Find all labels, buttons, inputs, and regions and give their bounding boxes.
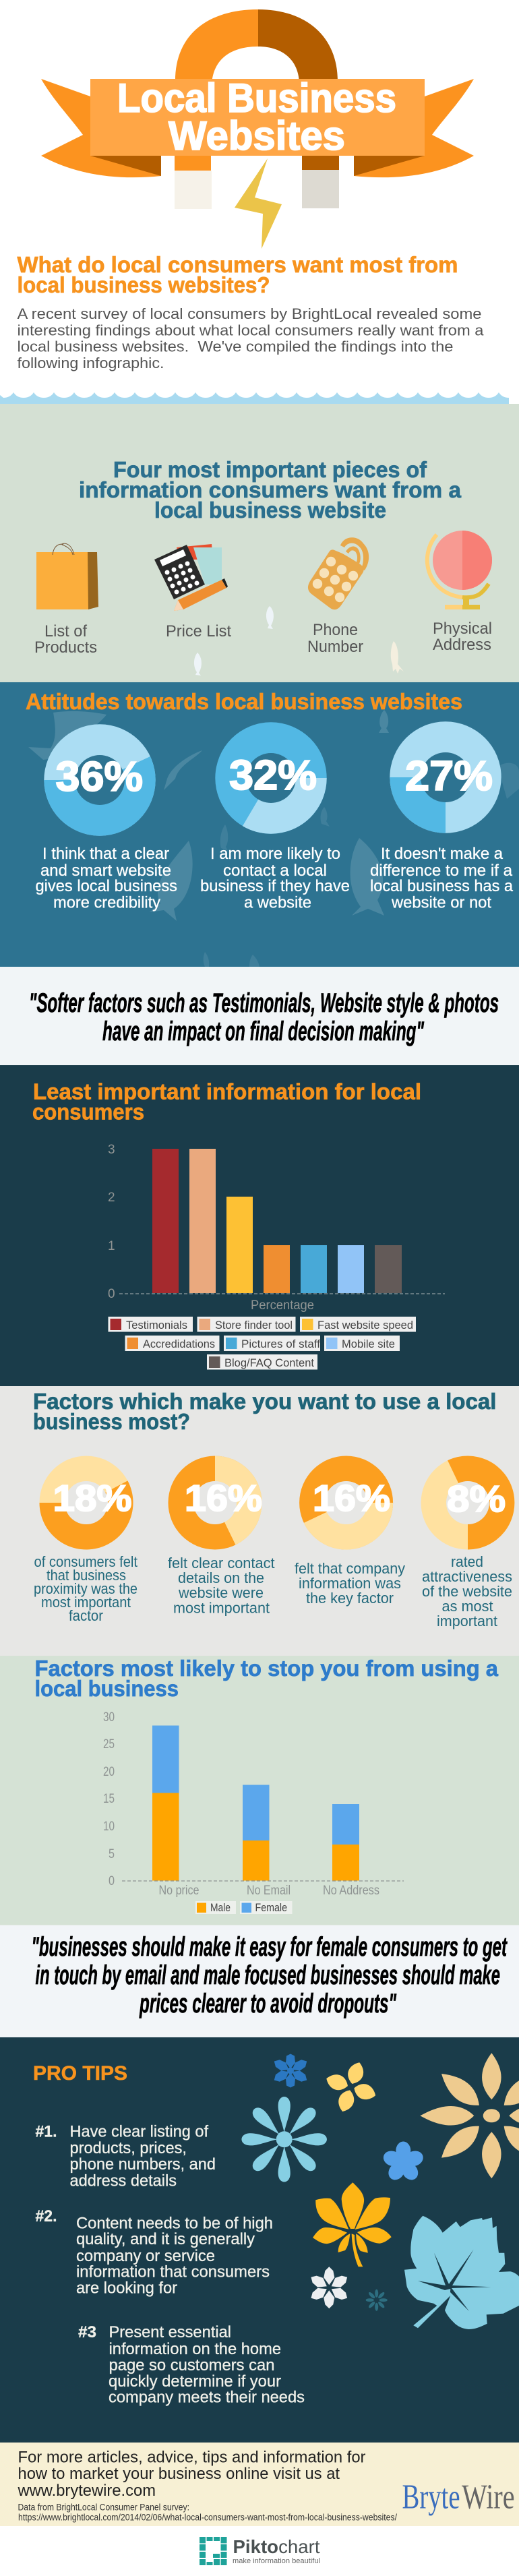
intro heading <box>18 252 458 297</box>
caption: 16% company <box>295 1560 405 1607</box>
panel: quote, softer factors <box>0 967 519 1065</box>
caption: 18%: most important <box>41 1594 131 1611</box>
caption: 32%: a website <box>244 894 311 911</box>
title: Local Business <box>117 76 396 121</box>
bar chart: 2 <box>108 1191 115 1205</box>
caption: 16% contact <box>168 1555 275 1617</box>
data source <box>18 2501 397 2523</box>
caption: 27%: difference to me if a <box>370 862 513 880</box>
intro paragraph: interesting findings about what local consumers really want from a <box>18 322 484 338</box>
decorative fish <box>194 606 404 676</box>
stacked bar chart: No price <box>159 1884 200 1898</box>
donut: 16% company <box>299 1456 393 1550</box>
legend <box>195 1901 293 1914</box>
tip 1: products, prices, <box>70 2139 187 2157</box>
legend: Female <box>255 1901 287 1914</box>
intro paragraph: local business websites. We've compiled the findings into the <box>18 338 453 355</box>
donut: 8% <box>421 1456 515 1549</box>
stacked bar chart: No Email <box>247 1884 291 1898</box>
legend <box>108 1317 416 1370</box>
legend: Male <box>210 1901 231 1914</box>
tip 3: information on the home <box>109 2340 281 2358</box>
legend: Store finder tool <box>215 1319 293 1331</box>
tip 2: quality, and it is generally <box>76 2230 255 2248</box>
tip 1: Have clear listing of <box>70 2122 208 2141</box>
bar chart: Percentage <box>251 1298 314 1313</box>
heading: consumers <box>32 1099 144 1125</box>
caption: 32%: contact a local <box>223 862 327 880</box>
stacked bar chart: No Address <box>323 1884 379 1898</box>
stacked bar chart: 5 <box>109 1847 115 1861</box>
bar chart: 0 <box>108 1287 115 1301</box>
heading <box>32 1079 421 1125</box>
caption: 27%: It doesn't make a <box>381 845 503 863</box>
caption: 32% <box>200 845 350 911</box>
stacked bar chart: 0 <box>109 1874 115 1888</box>
icon: small blue flower <box>272 2054 309 2087</box>
caption: 16% contact: website were <box>178 1584 264 1601</box>
icon: blue hibiscus <box>381 2141 425 2183</box>
tip 1 <box>35 2122 216 2190</box>
caption: 18% <box>34 1553 138 1624</box>
icon: calculator, papers and pencil <box>154 544 228 611</box>
caption: 18%: factor <box>69 1607 103 1624</box>
data source: https://www.brightlocal.com/2014/02/06/what-local-consumers-want-most-from-local-business-websites/ <box>18 2512 397 2523</box>
call to action text: For more articles, advice, tips and information for <box>18 2449 365 2466</box>
panel: least important information <box>0 1065 519 1386</box>
caption: 18%: that business <box>47 1567 126 1584</box>
heading: local business website <box>154 498 386 522</box>
donut: 32% <box>215 722 327 834</box>
title <box>117 76 396 158</box>
header: magnet and title banner <box>41 9 474 249</box>
caption: 27%: website or not <box>391 894 491 911</box>
donut: 32%: 32% <box>229 752 317 799</box>
tip 3: company meets their needs <box>109 2388 305 2407</box>
caption: 32%: I am more likely to <box>210 845 340 863</box>
heading: Four most important pieces of <box>113 457 427 482</box>
icon: light blue flower <box>241 2097 327 2182</box>
icon labels: Price List <box>166 622 231 640</box>
icon: globe <box>427 531 492 609</box>
caption: 8%: rated <box>451 1553 483 1570</box>
caption: 27% <box>370 845 514 911</box>
tip 3: Present essential <box>109 2323 231 2341</box>
stacked bar chart: 20 <box>103 1765 115 1779</box>
tip 2: Content needs to be of high <box>76 2214 273 2233</box>
caption: 36%: more credibility <box>53 894 160 911</box>
icon labels: Number <box>307 638 363 656</box>
icon: magnet <box>175 9 339 209</box>
panel: attitudes towards local business websites <box>0 682 519 967</box>
decorative sea creatures <box>28 710 519 967</box>
heading <box>33 1389 497 1434</box>
stacked bar chart: 25 <box>103 1737 115 1751</box>
heading: Attitudes towards local business websites <box>26 689 462 714</box>
heading: local business <box>35 1676 179 1701</box>
caption: 8% <box>422 1553 512 1629</box>
heading: Factors which make you want to use a local <box>33 1389 497 1414</box>
legend: Blog/FAQ Content <box>224 1356 314 1369</box>
tip 1: phone numbers, and <box>70 2155 216 2174</box>
heading: Least important information for local <box>33 1079 421 1104</box>
donut: 8%: 8% <box>447 1478 506 1520</box>
caption: 8%: attractiveness <box>422 1568 512 1585</box>
icon labels: Products <box>34 638 97 657</box>
donut: 27%: 27% <box>405 753 493 800</box>
donut: 16% contact <box>169 1456 262 1549</box>
caption: 8%: as most <box>442 1598 493 1615</box>
caption: 8%: important <box>437 1613 497 1629</box>
caption: 16% company: information was <box>299 1575 401 1592</box>
panel: factors which make you want to use a local business <box>0 1386 519 1656</box>
caption: 36%: I think that a clear <box>42 845 169 863</box>
heading <box>79 457 462 522</box>
tip 3: #3 <box>78 2323 96 2341</box>
caption: 27%: local business has a <box>370 877 514 895</box>
legend: Pictures of staff <box>241 1338 320 1350</box>
data source: Data from BrightLocal Consumer Panel survey: <box>18 2501 189 2512</box>
legend: Fast website speed <box>317 1319 413 1331</box>
icon labels: Address <box>433 636 491 654</box>
donut: 27% <box>390 721 501 833</box>
icon: large peach flower <box>420 2053 519 2178</box>
legend: Testimonials <box>126 1319 187 1331</box>
caption: 18%: proximity was the <box>34 1580 138 1597</box>
donut: 18%: 18% <box>53 1477 132 1519</box>
donut: 16% company: 16% <box>313 1477 390 1519</box>
panel: four most important pieces <box>0 404 519 682</box>
intro paragraph: A recent survey of local consumers by BrightLocal revealed some <box>18 305 481 322</box>
intro paragraph <box>18 305 484 371</box>
panel: factors most likely to stop you <box>0 1656 519 1925</box>
tip 3: quickly determine if your <box>109 2372 281 2391</box>
panel: footer call to action <box>0 2443 519 2526</box>
heading: Factors most likely to stop you from using a <box>35 1656 499 1681</box>
title: Websites <box>169 113 345 158</box>
icon: yellow four petal flower <box>318 2054 384 2120</box>
icon labels <box>34 620 492 657</box>
caption: 32%: business if they have <box>200 877 350 895</box>
donut: 36% <box>44 724 156 836</box>
icon: shopping bag <box>36 543 98 609</box>
icon labels: Physical <box>433 620 492 638</box>
panel: quote, businesses should make it easy <box>0 1925 519 2037</box>
stacked bar chart: 15 <box>103 1792 115 1806</box>
icon: mobile phone <box>308 537 369 609</box>
icon: small teal flower <box>366 2289 388 2311</box>
logo: BryteWire: Bryte <box>402 2478 460 2516</box>
intro heading: local business websites? <box>18 272 270 297</box>
wordmark: Piktochart <box>233 2536 320 2557</box>
intro heading: What do local consumers want most from <box>18 252 458 277</box>
tagline: make information beautiful <box>233 2557 320 2565</box>
caption: 16% contact: felt clear contact <box>168 1555 275 1571</box>
caption: 16% company: the key factor <box>306 1590 394 1607</box>
caption: 36%: gives local business <box>35 877 177 895</box>
logo: Piktochart <box>200 2536 320 2565</box>
icon: lightning bolt <box>235 158 282 249</box>
call to action text: www.brytewire.com <box>18 2482 156 2500</box>
tip 3 <box>78 2323 305 2407</box>
heading <box>35 1656 499 1701</box>
caption: 16% contact: most important <box>173 1599 270 1617</box>
legend: Mobile site <box>342 1338 395 1350</box>
tip 2: are looking for <box>76 2279 177 2298</box>
intro paragraph: following infographic. <box>18 355 164 371</box>
bar chart: 1 <box>108 1239 115 1253</box>
logo: BryteWire <box>402 2478 515 2516</box>
tip 1: #1. <box>35 2122 57 2141</box>
banner <box>90 79 425 156</box>
caption: 16% company: felt that company <box>295 1560 405 1577</box>
tip 2 <box>35 2207 273 2298</box>
call to action text <box>18 2449 365 2500</box>
heading: information consumers want from a <box>79 477 462 502</box>
tip 2: company or service <box>76 2247 215 2265</box>
caption: 18%: of consumers felt <box>34 1553 138 1570</box>
caption: 36% <box>35 845 177 911</box>
legend: Accredidations <box>143 1338 215 1350</box>
tip 1: address details <box>70 2172 177 2190</box>
donut: 16% contact: 16% <box>185 1477 262 1519</box>
icon: orange leaf <box>313 2182 392 2267</box>
logo mark <box>200 2537 226 2565</box>
icon labels: List of <box>44 622 87 640</box>
caption: 8%: of the website <box>422 1583 512 1600</box>
panel: pro tips <box>0 2037 519 2443</box>
tip 3: page so customers can <box>109 2356 275 2374</box>
icon: white flower <box>308 2267 350 2308</box>
bar chart <box>108 1143 445 1313</box>
ribbon tails <box>41 79 474 177</box>
heading: business most? <box>33 1409 190 1434</box>
donut: 18% <box>39 1456 133 1549</box>
icon labels: Phone <box>313 621 358 639</box>
caption: 16% contact: details on the <box>178 1569 264 1586</box>
stacked bar chart: 10 <box>103 1820 115 1834</box>
stacked bar chart <box>103 1710 404 1898</box>
wave divider <box>0 392 509 405</box>
heading: PRO TIPS <box>33 2062 127 2085</box>
tip 2: #2. <box>35 2207 57 2225</box>
caption: 36%: and smart website <box>40 862 171 880</box>
call to action text: how to market your business online visit us at <box>18 2465 340 2483</box>
stacked bar chart: 30 <box>103 1710 115 1725</box>
bar chart: 3 <box>108 1143 115 1157</box>
icon: large blue leaf <box>404 2216 519 2329</box>
donut: 36%: 36% <box>55 754 143 800</box>
tip 2: information that consumers <box>76 2263 270 2281</box>
